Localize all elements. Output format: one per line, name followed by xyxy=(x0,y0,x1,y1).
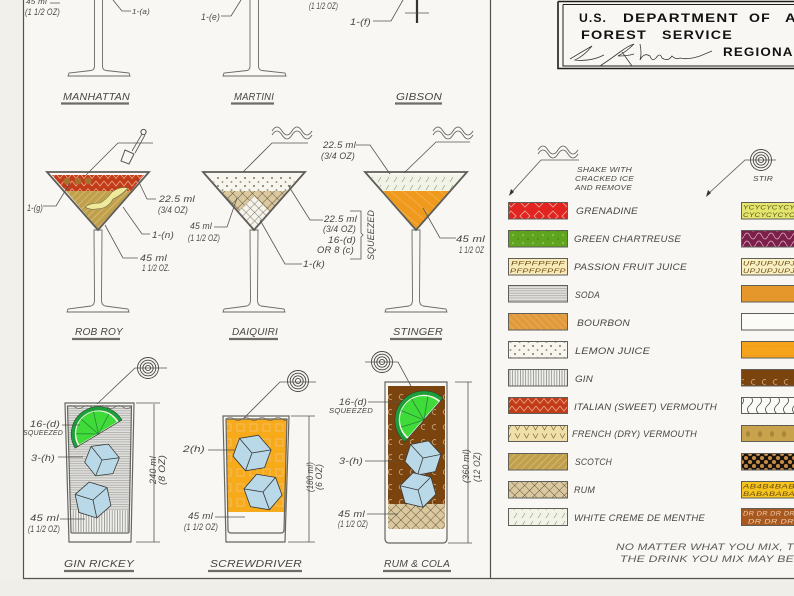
swatch: yellow xyxy=(742,482,794,498)
swatch: rust xyxy=(742,508,794,526)
glass: Rum and Cola: 3-(h) xyxy=(339,456,363,467)
legend item: soda: SODA xyxy=(575,290,600,301)
legend item: white creme de menthe xyxy=(508,508,705,526)
glass: Manhattan (cropped top) xyxy=(25,0,150,76)
title block: Forest Service: REGIONAL xyxy=(723,47,794,59)
icon: cocktail pick xyxy=(121,129,146,164)
title block: Forest Service: DEPARTMENT xyxy=(623,13,739,25)
title: Screwdriver: SCREWDRIVER xyxy=(210,558,302,570)
footer note: NO MATTER WHAT YOU MIX, T xyxy=(616,542,794,553)
legend item: soda xyxy=(508,286,600,302)
legend item: passion fruit juice xyxy=(508,258,687,275)
swatch: yellow: BABABABA xyxy=(743,491,794,498)
legend item: green chartreuse xyxy=(508,230,681,247)
glass: Screwdriver: 2(h) xyxy=(182,444,205,455)
title: Gin Rickey: GIN RICKEY xyxy=(64,558,135,570)
swatch: rust: DR DR DR DR xyxy=(743,510,794,518)
icon: ice cube xyxy=(402,436,444,480)
glass: Stinger: 1 1/2 OZ xyxy=(459,245,484,255)
glass: Martini (cropped top): 1-(e) xyxy=(201,12,220,22)
title block: Forest Service: FOREST xyxy=(581,30,647,42)
swatch: rust: DR DR DR xyxy=(748,518,794,526)
title: Manhattan: MANHATTAN xyxy=(63,91,130,103)
legend header: stir: STIR xyxy=(753,174,773,183)
title: Rob Roy: ROB ROY xyxy=(75,326,124,338)
legend item: french dry vermouth xyxy=(508,426,697,442)
legend item: bourbon: BOURBON xyxy=(577,318,630,329)
glass: Rum and Cola: SQUEEZED xyxy=(329,406,373,415)
glass: Screwdriver: (180 ml) xyxy=(305,462,315,492)
glass: Rob Roy: 45 ml xyxy=(140,253,168,264)
legend item: rum: RUM xyxy=(574,485,595,496)
legend header: shake: SHAKE WITH xyxy=(577,165,632,174)
legend item: bourbon xyxy=(508,314,630,330)
glass: Daiquiri: 45 ml xyxy=(190,221,213,232)
glass: Gin Rickey: 240 ml xyxy=(148,455,158,485)
glass: Daiquiri: (1 1/2 OZ) xyxy=(188,233,220,243)
title: Rum and Cola: RUM & COLA xyxy=(384,558,450,570)
icon: ice cube xyxy=(398,468,438,512)
glass: Rum and Cola: (12 OZ) xyxy=(472,452,482,482)
icon: ice cube xyxy=(230,429,274,477)
glass: Screwdriver xyxy=(182,370,324,542)
title: Daiquiri: DAIQUIRI xyxy=(232,326,278,338)
glass: Stinger: 22.5 ml xyxy=(322,140,357,151)
legend header: stir xyxy=(706,150,776,197)
legend item: french dry vermouth: FRENCH (DRY) VERMOUTH xyxy=(572,429,697,440)
signature xyxy=(570,44,712,66)
glass: Manhattan (cropped top): (1 1/2 OZ) xyxy=(25,7,60,17)
swatch: yellow-green: CYCYCYCYC xyxy=(743,212,794,219)
legend item: white creme de menthe: WHITE CREME DE MENTHE xyxy=(574,513,705,524)
glass: Rob Roy: 22.5 ml xyxy=(158,194,196,205)
legend item: italian sweet vermouth xyxy=(508,398,717,414)
swatch: pale yellow: UPJUPJUPJ xyxy=(743,260,794,268)
glass: Daiquiri: (3/4 OZ) xyxy=(323,224,356,235)
glass: Manhattan (cropped top): 1-(a) xyxy=(132,7,150,16)
legend item: passion fruit juice: PFPFPFPF xyxy=(511,260,566,268)
legend: right column swatches xyxy=(742,202,794,526)
glass: Gibson pick (cropped top): 1-(f) xyxy=(350,17,371,27)
glass: Screwdriver: (1 1/2 OZ) xyxy=(184,522,218,532)
glass: Daiquiri xyxy=(188,127,376,312)
glass: Screwdriver: 45 ml xyxy=(188,511,214,522)
footer note xyxy=(616,542,794,565)
icon: ice cube xyxy=(73,479,113,521)
legend item: green chartreuse: GREEN CHARTREUSE xyxy=(574,234,681,245)
legend item: passion fruit juice: PASSION FRUIT JUICE xyxy=(574,262,687,273)
glass: Rob Roy: 1-(n) xyxy=(152,230,174,241)
legend item: gin xyxy=(508,370,593,386)
glass: Stinger: 45 ml xyxy=(456,234,486,245)
glass: Gin Rickey: SQUEEZED xyxy=(23,428,63,437)
swatch: white wave xyxy=(742,398,794,414)
title: Stinger: STINGER xyxy=(393,326,443,338)
swatch: orange xyxy=(742,286,794,302)
glass: Rum and Cola: 45 ml xyxy=(338,509,366,520)
icon: stir spiral xyxy=(372,352,392,372)
legend item: lemon juice xyxy=(508,342,651,358)
swatch: yellow-green: YCYCYCYCY xyxy=(743,204,794,212)
legend item: passion fruit juice: PFPFPFPFP xyxy=(510,268,566,275)
icon: lime wedge xyxy=(61,397,122,448)
icon: ice cube xyxy=(82,438,122,482)
glass: Daiquiri: 16-(d) xyxy=(328,235,356,246)
glass: Stinger: (3/4 OZ) xyxy=(321,151,355,162)
swatch: yellow-green xyxy=(742,202,794,219)
legend header: shake: AND REMOVE xyxy=(574,183,633,192)
swatch: bright orange xyxy=(742,342,794,358)
glass: Rob Roy: 1 1/2 OZ. xyxy=(142,263,170,273)
title block: Forest Service: U.S. xyxy=(579,13,607,25)
legend header: shake: CRACKED ICE xyxy=(575,174,635,183)
icon: stir spiral xyxy=(288,370,308,392)
legend item: scotch: SCOTCH xyxy=(575,457,612,468)
glass: Rum and Cola: 16-(d) xyxy=(339,397,367,408)
legend item: rum xyxy=(508,482,595,498)
swatch: pale yellow xyxy=(742,258,794,275)
glass: Gin Rickey xyxy=(23,358,167,542)
swatch: gold xyxy=(742,426,794,442)
icon: shake wave xyxy=(433,127,473,139)
title block: Forest Service xyxy=(558,2,794,68)
icon: stir spiral xyxy=(138,358,158,378)
legend item: italian sweet vermouth: ITALIAN (SWEET) VERMOUTH xyxy=(574,402,717,413)
glass: Rob Roy: 1-(g) xyxy=(27,203,43,213)
glass: Gin Rickey: (1 1/2 OZ) xyxy=(28,524,60,534)
title: Martini: MARTINI xyxy=(234,91,274,103)
glass: Gibson pick (cropped top): (1 1/2 OZ) xyxy=(309,1,338,11)
swatch: wine xyxy=(742,230,794,247)
swatch: black and orange xyxy=(742,454,794,470)
glass: Rob Roy xyxy=(27,129,196,312)
legend header: shake xyxy=(509,146,635,196)
glass: Gin Rickey: 45 ml xyxy=(30,513,60,524)
glass: Daiquiri: SQUEEZED xyxy=(366,210,376,260)
footer note: THE DRINK YOU MIX MAY BE xyxy=(620,554,794,565)
glass: Gibson pick (cropped top) xyxy=(309,0,429,27)
swatch: white xyxy=(742,314,794,330)
legend: left column xyxy=(508,202,717,526)
legend item: gin: GIN xyxy=(575,374,593,385)
icon: lemon twist xyxy=(85,188,128,209)
icon: shake wave xyxy=(272,127,312,139)
title block: Forest Service: OF xyxy=(749,13,771,25)
glass: Screwdriver: (6 OZ) xyxy=(314,464,324,490)
glass: Daiquiri: 1-(k) xyxy=(303,259,325,270)
title block: Forest Service: SERVICE xyxy=(662,30,733,42)
legend item: scotch xyxy=(508,454,612,470)
glass: Martini (cropped top) xyxy=(201,0,286,76)
glass: Rum and Cola: (1 1/2 OZ) xyxy=(338,519,368,529)
icon: lime wedge xyxy=(383,379,443,442)
swatch: yellow: AB4B4BAB xyxy=(742,484,794,490)
glass: Daiquiri: 22.5 ml xyxy=(323,214,358,225)
glass: Stinger xyxy=(321,127,486,312)
swatch: brown xyxy=(742,370,794,386)
icon: ice cube xyxy=(241,468,285,516)
glass: Rum and Cola: (360 ml) xyxy=(461,449,471,483)
swatch: pale yellow: UPJUPJUPJ xyxy=(743,268,794,275)
glass: Daiquiri: OR 8 (c) xyxy=(317,245,354,256)
legend item: grenadine: GRENADINE xyxy=(576,206,638,217)
glass: Gin Rickey: 3-(h) xyxy=(31,453,55,464)
glass: Rob Roy: (3/4 OZ) xyxy=(158,205,188,216)
title: Gibson: GIBSON xyxy=(396,91,442,103)
legend item: lemon juice: LEMON JUICE xyxy=(575,346,651,357)
glass: Gin Rickey: 16-(d) xyxy=(30,419,60,430)
glass: Rum and Cola xyxy=(329,352,482,543)
legend item: grenadine xyxy=(508,202,638,219)
glass: Gin Rickey: (8 OZ) xyxy=(157,455,167,485)
